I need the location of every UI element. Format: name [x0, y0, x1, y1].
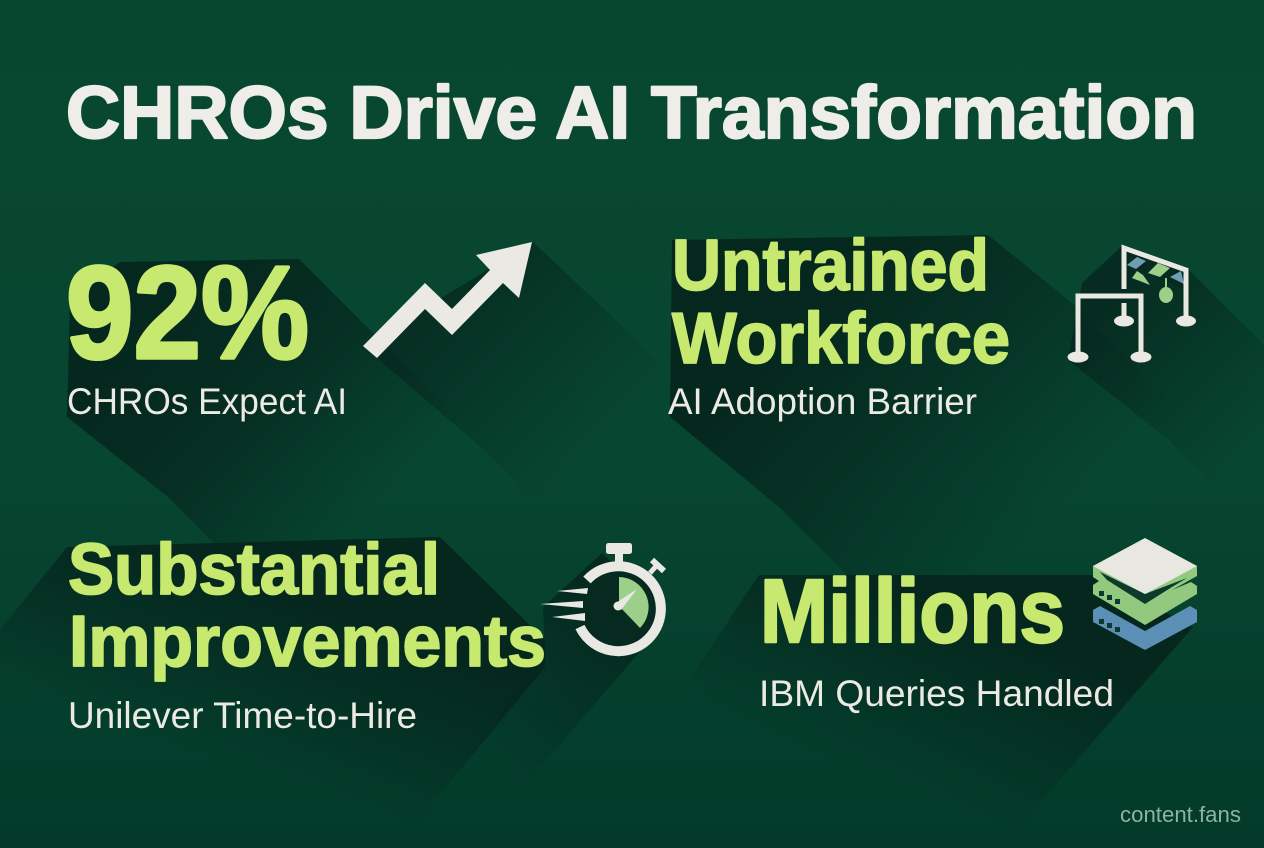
panel: substantial improvements [68, 530, 664, 736]
heading: Untrained Workforce: Untrained [672, 226, 989, 306]
heading: Substantial Improvements: Substantial [68, 530, 440, 610]
heading: Substantial Improvements [68, 530, 546, 682]
panel: millions of IBM queries [759, 538, 1197, 714]
stat: 92%: 92% [66, 239, 309, 386]
long diagonal shadows [0, 235, 1264, 845]
label: Unilever Time-to-Hire: Unilever Time-to-Hire [68, 695, 417, 736]
icon: barriers [1068, 248, 1196, 362]
panel: 92% CHROs expect AI [66, 239, 532, 422]
title: CHROs Drive AI Transformation [66, 71, 1197, 154]
icon: stopwatch [540, 543, 664, 651]
icon: server stack [1093, 538, 1197, 650]
label: IBM Queries Handled: IBM Queries Handled [759, 673, 1114, 714]
panel: untrained workforce [668, 226, 1196, 422]
heading: Substantial Improvements: Improvements [69, 602, 546, 682]
label: AI Adoption Barrier: AI Adoption Barrier [668, 381, 977, 422]
watermark: content.fans: content.fans [1120, 802, 1241, 827]
heading: Untrained Workforce: Workforce [672, 299, 1010, 379]
label: CHROs Expect AI: CHROs Expect AI [67, 381, 347, 422]
heading: Millions: Millions [760, 562, 1065, 662]
heading: Untrained Workforce [672, 226, 1010, 379]
icon: rising arrow [363, 242, 532, 358]
